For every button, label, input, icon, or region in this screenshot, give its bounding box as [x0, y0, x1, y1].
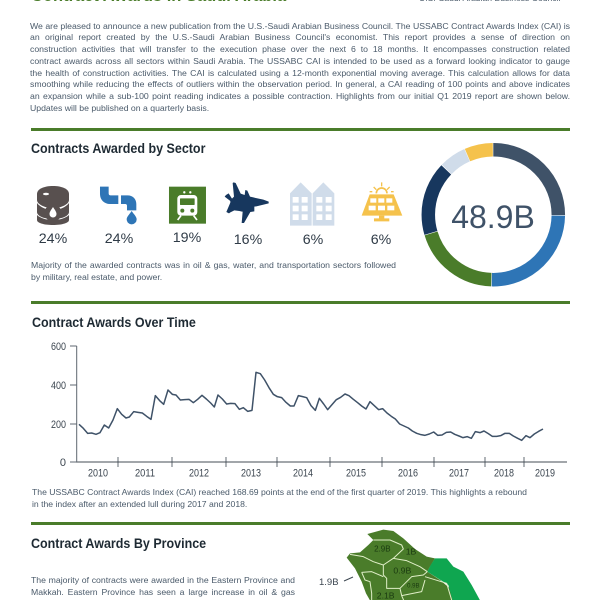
label: power share: 6%: [371, 232, 391, 248]
y axis and labels: [51, 341, 77, 469]
text: province commentary: Makkah. Eastern Province has seen a large increase in oil & gas: [31, 587, 295, 597]
text: index commentary: [32, 487, 527, 509]
text: index commentary: The USSABC Contract Awards Index (CAI) reached 168.69 points at the end of the first quarter of 2019. This highlights a rebound: [32, 487, 527, 497]
intro text block: construction activities that will transfer to the execution phase over the next 6 to 18 months. It encompasses construction related: [30, 44, 570, 54]
heading: contract awards by province: Contract Awards By Province: [31, 536, 206, 551]
text: sector summary: by military, real estate, and power.: [31, 272, 162, 282]
intro text block: an original report created by the U.S.-Saudi Arabian Business Council's economist. This report provides a sense of direction on: [30, 32, 570, 42]
map: awards by province: 1B: [406, 546, 417, 556]
label: water share: 24%: [105, 231, 133, 247]
x axis and year labels: 2013: [241, 468, 261, 480]
y axis and labels: 400: [51, 380, 66, 392]
label: military share: 16%: [234, 232, 262, 248]
label: oil and gas share: 24%: [39, 231, 67, 247]
intro text block: We are pleased to announce a new publication from the U.S.-Saudi Arabian Business Council. The USSABC Contract Awards Index (CAI) is: [30, 20, 570, 30]
callout: 1.9B: 1.9B: [319, 577, 339, 588]
text: province commentary: The majority of contracts were awarded in the Eastern Province and: [31, 575, 295, 585]
x axis and year labels: 2014: [293, 468, 313, 480]
intro text block: smoothing while reducing the effects of outliers within the observation period. In general, a CAI reading of 100 points and above indicates: [30, 79, 570, 89]
text: index commentary: in the index after an extended lull during 2017 and 2018.: [32, 499, 247, 509]
x axis and year labels: 2015: [346, 468, 366, 480]
y axis and labels: 600: [51, 341, 66, 353]
x axis and year labels: 2019: [535, 468, 555, 480]
intro text block: an expansion while a sub-100 point reading indicates a possible contraction. Highlights from our initial Q1 2019 report are shown below.: [30, 91, 570, 101]
map: awards by province: 2.9B: [374, 544, 391, 553]
intro text block: contract awards across all sectors within Saudi Arabia. The USSABC CAI is intended to be used as a forward looking indicator to gauge: [30, 56, 570, 66]
x axis and year labels: 2018: [494, 468, 514, 480]
x axis and year labels: 2016: [398, 468, 418, 480]
intro text block: [30, 20, 570, 113]
x axis and year labels: 2011: [135, 468, 155, 480]
map: awards by province: 0.9B: [407, 583, 419, 589]
x axis and year labels: 2017: [449, 468, 469, 480]
x axis and year labels: 2012: [189, 468, 209, 480]
x axis and year labels: [76, 457, 567, 480]
map: awards by province: 0.9B: [393, 565, 411, 575]
intro text block: the health of construction activities. The CAI is calculated using a 12-month exponential moving average. This calculation allows for data: [30, 68, 570, 78]
panel: contracts awarded by sector: [31, 141, 566, 286]
callout: 1.9B: [319, 577, 353, 588]
text: sector summary: Majority of the awarded contracts was in oil & gas, water, and transportation sectors followed: [31, 260, 396, 270]
donut chart: total contract value: 48.9B: [451, 199, 535, 235]
y axis and labels: 0: [60, 457, 66, 469]
label: real estate share: 6%: [303, 232, 323, 248]
x axis and year labels: 2010: [88, 468, 108, 480]
heading: contract awards over time: Contract Awards Over Time: [32, 315, 196, 330]
text: sector summary: [31, 260, 396, 282]
label: transportation share: 19%: [173, 230, 201, 246]
index line: [79, 372, 543, 440]
y axis and labels: 200: [51, 419, 66, 431]
text: province commentary: [31, 575, 295, 597]
heading: contracts awarded by sector: Contracts Awarded by Sector: [31, 141, 205, 156]
intro text block: Updates will be published on a quarterly basis.: [30, 103, 209, 113]
